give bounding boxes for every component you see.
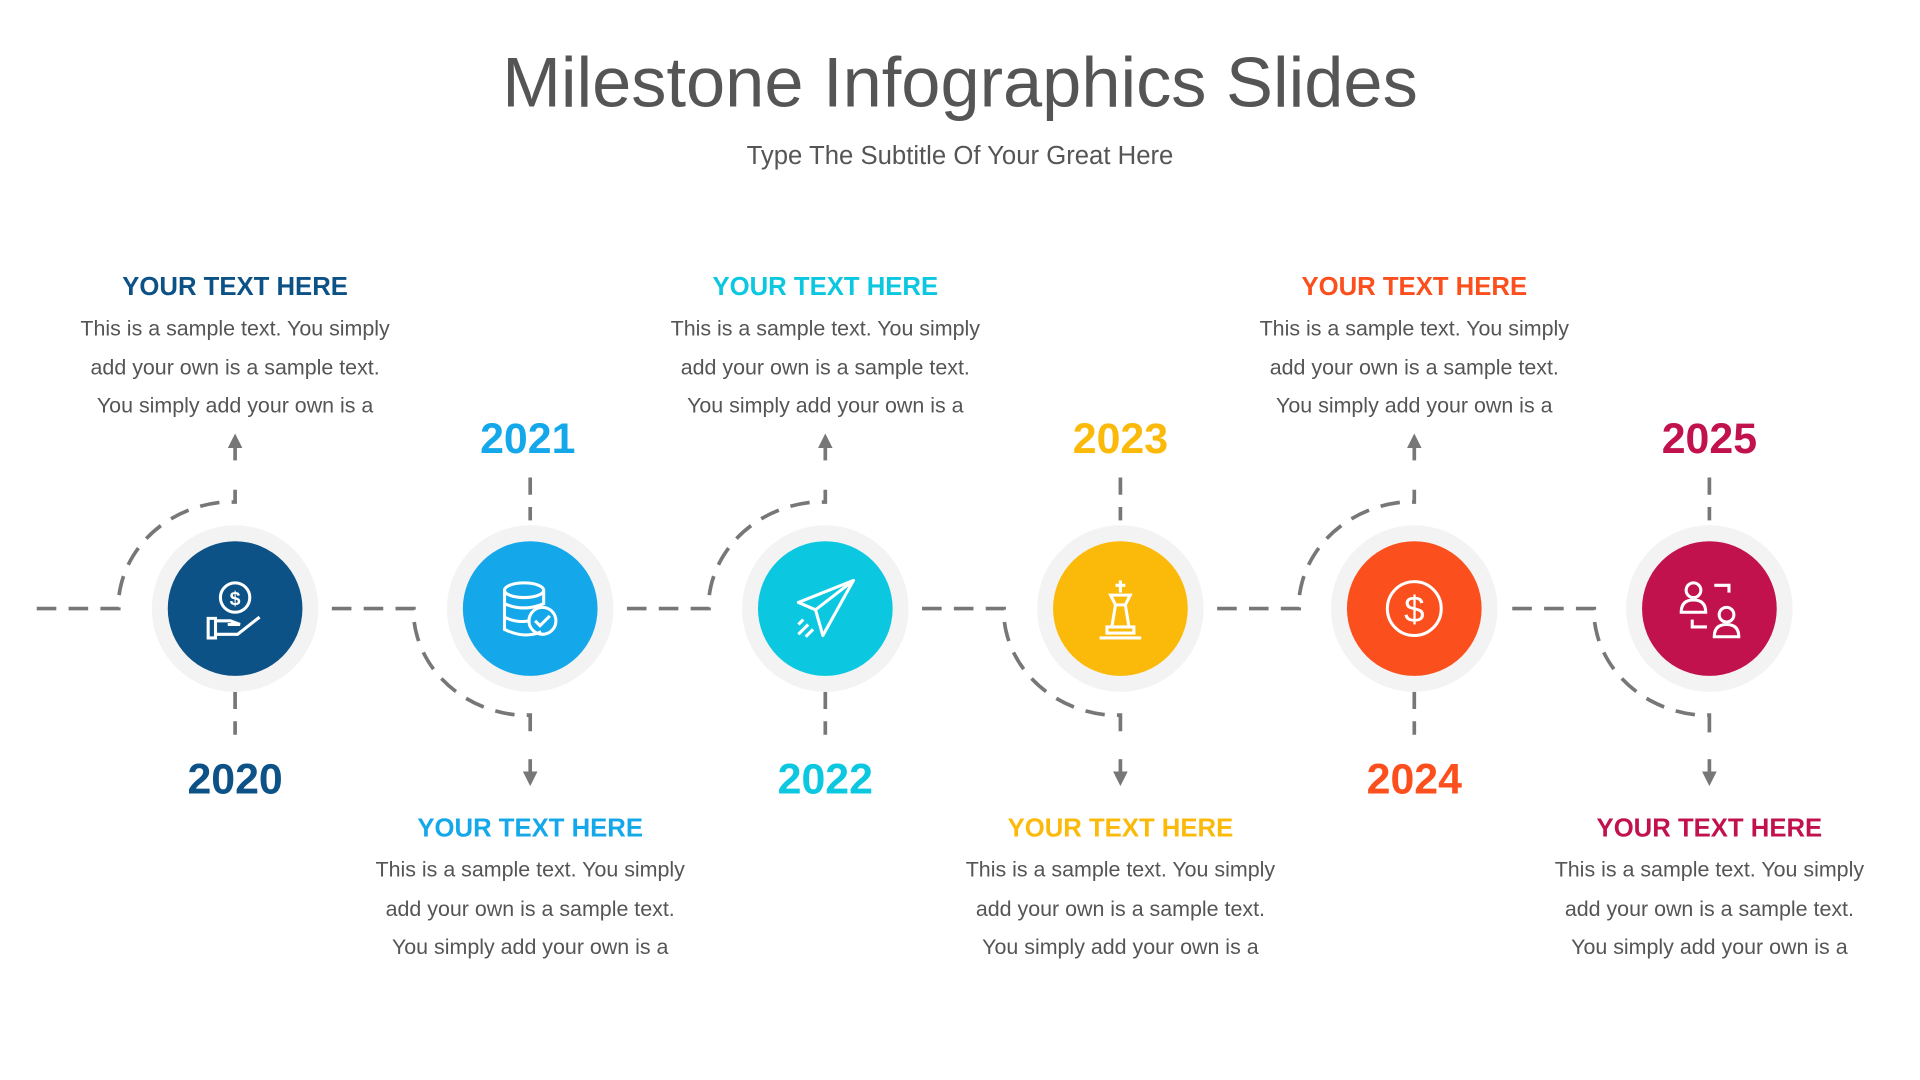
text block 4: add your own is a sample text. — [976, 897, 1265, 921]
text block 6: You simply add your own is a — [1571, 935, 1848, 959]
connectors — [37, 478, 1709, 735]
text block 4 — [966, 814, 1275, 959]
text block 1: add your own is a sample text. — [91, 356, 380, 380]
icon: user exchange — [1681, 583, 1739, 637]
arrows — [235, 441, 1709, 779]
milestone 2023 — [1037, 415, 1204, 692]
icon: dollar coin: $ — [1404, 589, 1424, 630]
text block 1 — [80, 273, 390, 418]
milestone 2022: 2022 — [778, 755, 873, 803]
milestone 2023: 2023 — [1073, 415, 1168, 463]
milestone 2025 — [1626, 415, 1793, 692]
subtitle: Type The Subtitle Of Your Great Here — [747, 142, 1173, 170]
icon: chess king — [1100, 580, 1141, 638]
icon: paper plane — [798, 580, 853, 637]
text block 6: This is a sample text. You simply — [1555, 858, 1864, 882]
text block 3: This is a sample text. You simply — [671, 317, 980, 341]
text block 4: YOUR TEXT HERE — [1008, 814, 1233, 842]
text block 6: YOUR TEXT HERE — [1597, 814, 1822, 842]
text block 2: YOUR TEXT HERE — [417, 814, 643, 842]
icon: hand with coin — [208, 583, 260, 638]
milestone 2022 — [742, 525, 909, 803]
text block 2: You simply add your own is a — [392, 935, 669, 959]
icon: database check — [504, 583, 556, 635]
text block 5 — [1260, 273, 1569, 418]
milestone 2024 — [1331, 525, 1498, 803]
text block 5: This is a sample text. You simply — [1260, 317, 1569, 341]
text block 1: YOUR TEXT HERE — [122, 273, 348, 301]
milestone 2021: 2021 — [480, 415, 575, 463]
milestone 2025: 2025 — [1662, 415, 1757, 463]
text block 3: You simply add your own is a — [687, 394, 964, 418]
text block 1: This is a sample text. You simply — [80, 317, 390, 341]
text block 4: This is a sample text. You simply — [966, 858, 1275, 882]
icon: dollar coin — [1387, 582, 1441, 636]
milestone 2020 — [152, 525, 318, 803]
milestone 2020: 2020 — [187, 755, 283, 803]
text block 5: YOUR TEXT HERE — [1301, 273, 1527, 301]
icon: hand with coin: $ — [230, 588, 241, 610]
title: Milestone Infographics Slides — [502, 43, 1418, 122]
text block 1: You simply add your own is a — [97, 394, 373, 418]
milestone 2021 — [447, 415, 613, 692]
text block 3: add your own is a sample text. — [681, 356, 970, 380]
text block 4: You simply add your own is a — [982, 935, 1259, 959]
text block 2: This is a sample text. You simply — [376, 858, 685, 882]
text block 3 — [671, 273, 980, 418]
text block 2 — [376, 814, 685, 959]
text block 3: YOUR TEXT HERE — [712, 273, 938, 301]
text block 5: add your own is a sample text. — [1270, 356, 1559, 380]
text block 5: You simply add your own is a — [1276, 394, 1553, 418]
text block 2: add your own is a sample text. — [386, 897, 675, 921]
milestone 2024: 2024 — [1367, 755, 1462, 803]
text block 6 — [1555, 814, 1864, 959]
text block 6: add your own is a sample text. — [1565, 897, 1854, 921]
